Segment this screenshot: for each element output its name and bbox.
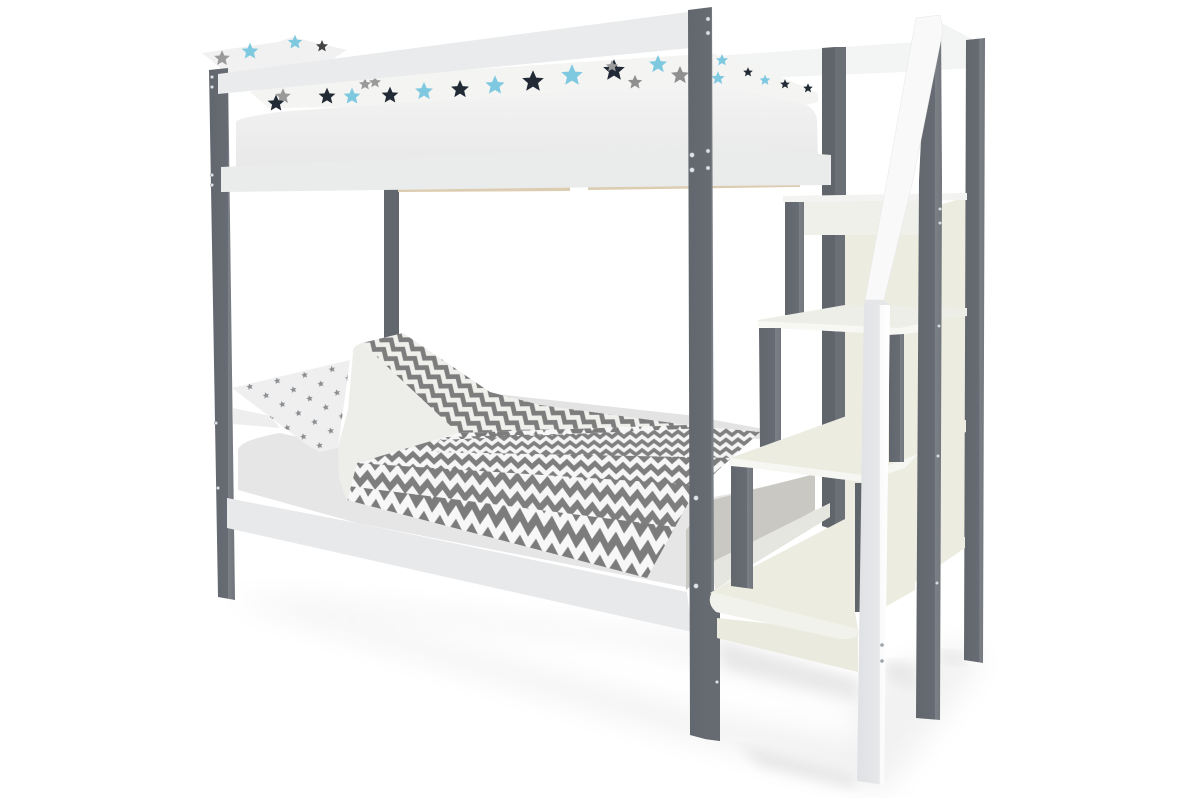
stair bottom step (710, 466, 965, 672)
lower left short rail (233, 408, 280, 428)
mattress side right (686, 474, 815, 590)
floor shadow (222, 598, 982, 792)
back left post (384, 188, 399, 345)
head rail (218, 12, 690, 94)
bolts (210, 17, 719, 684)
stair top step (783, 193, 967, 315)
left front post (209, 68, 235, 600)
upper bed slats (398, 183, 800, 192)
upper front rail (221, 145, 831, 192)
stair lower step (730, 334, 966, 612)
lower pillow with stars (232, 360, 350, 452)
lower side rail (712, 503, 830, 590)
upper star duvet (250, 53, 818, 111)
main front post (688, 7, 720, 741)
stair middle step (758, 305, 967, 447)
duvet fold chevron back (362, 333, 687, 433)
white handrail (864, 15, 943, 305)
back twin posts (822, 47, 846, 530)
back rail top right (715, 22, 978, 80)
bolts on white post (880, 643, 884, 663)
lower back rail (495, 394, 780, 442)
upper back pillow (202, 35, 347, 80)
centre post (916, 20, 942, 720)
duvet lower chevron (348, 425, 760, 578)
white front stair post (857, 305, 890, 785)
lower mattress (238, 433, 815, 590)
bolts on centre post (936, 208, 942, 584)
duvet white fold (338, 343, 458, 502)
upper mattress (236, 83, 818, 170)
product photo: bunk bed with stairs (202, 7, 985, 790)
lower front rail (227, 498, 692, 632)
stair back panel (845, 197, 967, 600)
right rear post (964, 38, 985, 663)
